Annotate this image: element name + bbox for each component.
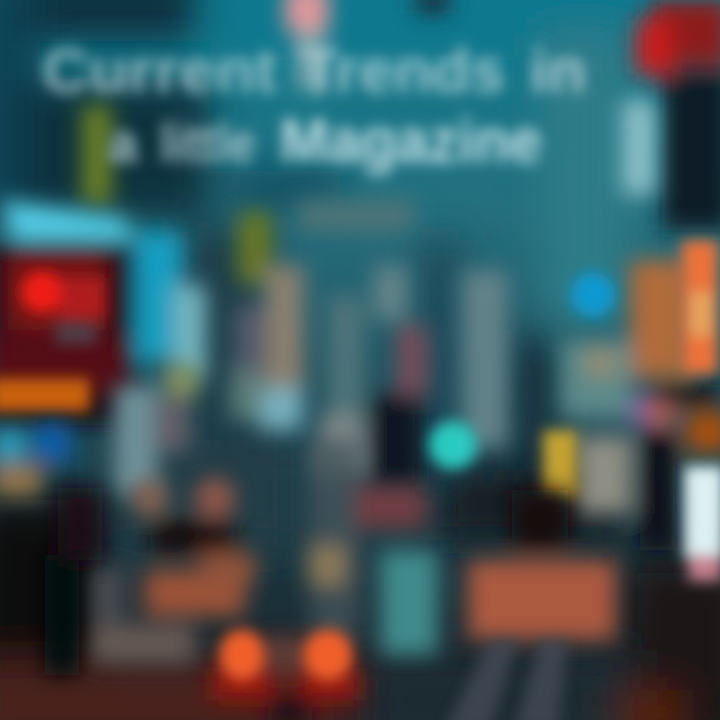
title text: Magazine bbox=[280, 107, 542, 176]
blue street lamp bbox=[571, 273, 615, 317]
road markings bbox=[445, 640, 568, 720]
street poles and lights bbox=[82, 100, 656, 490]
title text: little bbox=[160, 111, 255, 174]
building: dark red corner top right bbox=[285, 0, 720, 230]
right sign: orange storefront bbox=[543, 240, 720, 581]
crowd of people bbox=[90, 440, 616, 663]
title text: a bbox=[108, 111, 139, 174]
pedestrian silhouette bbox=[45, 488, 102, 675]
title text bbox=[42, 37, 586, 176]
teal street lamp bbox=[429, 421, 477, 469]
title text: Current bbox=[42, 37, 277, 106]
left sign: neon billboard bbox=[0, 200, 206, 496]
car tail lights bbox=[212, 629, 360, 720]
title text: Trends bbox=[300, 37, 505, 106]
title text: in bbox=[530, 37, 586, 106]
